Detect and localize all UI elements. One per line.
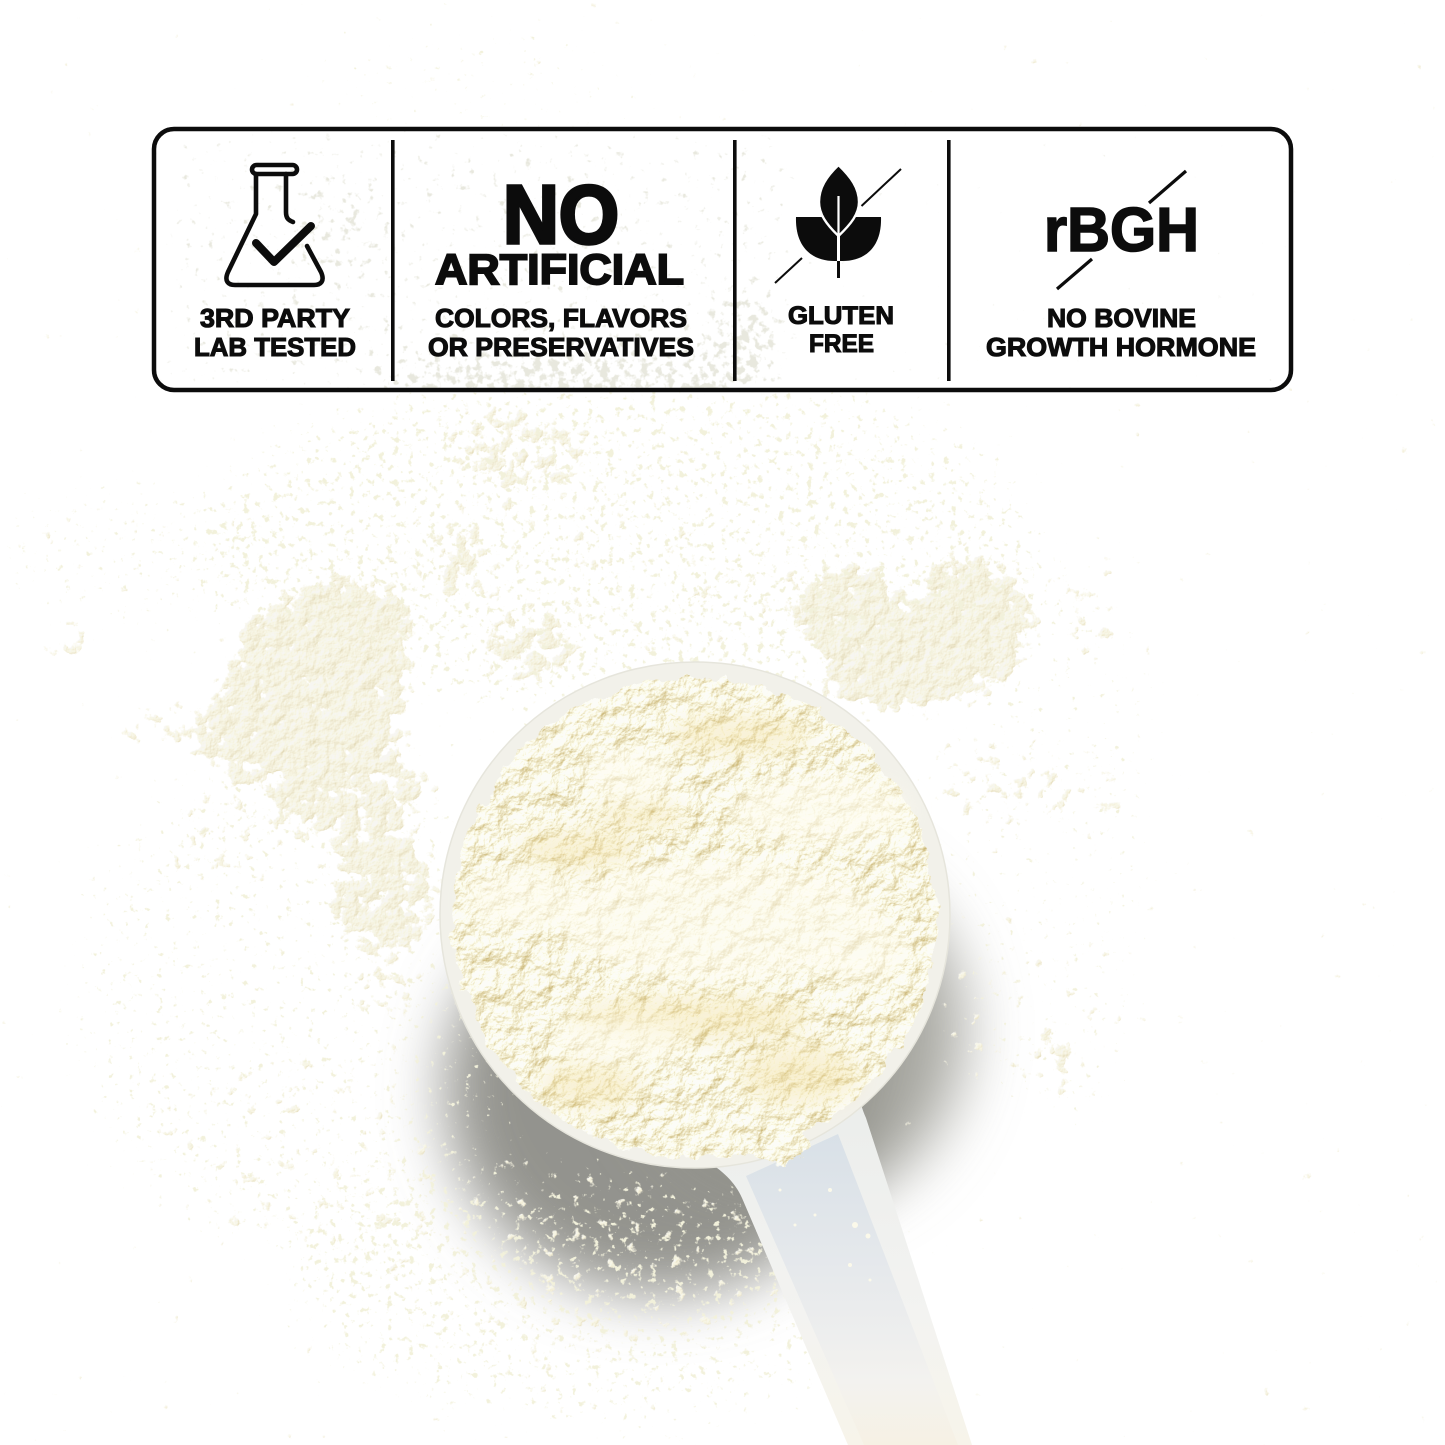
label: colors, flavors or preservatives bbox=[428, 303, 694, 362]
icon: crossed-out rBGH: rBGH bbox=[1044, 196, 1199, 265]
icon: crossed-out rBGH bbox=[1044, 171, 1199, 289]
measuring scoop bbox=[440, 662, 972, 1445]
panel box bbox=[154, 129, 1291, 390]
divider bbox=[947, 140, 951, 381]
label: colors, flavors or preservatives: OR PRESERVATIVES bbox=[428, 332, 694, 362]
icon: flask with check bbox=[226, 165, 323, 285]
heading: no artificial bbox=[435, 168, 684, 294]
label: no bovine growth hormone bbox=[986, 303, 1256, 362]
label: 3rd party lab tested bbox=[194, 303, 356, 362]
bright powder lumps bbox=[465, 749, 910, 1062]
powder heap bbox=[453, 678, 937, 1163]
powder showing through panel bbox=[170, 130, 790, 421]
warm powder tones bbox=[520, 717, 860, 1107]
label: no bovine growth hormone: GROWTH HORMONE bbox=[986, 332, 1256, 362]
scoop bowl bbox=[440, 662, 950, 1168]
scattered powder clumps bbox=[0, 400, 1150, 1425]
divider bbox=[391, 140, 395, 381]
scoop handle inner channel bbox=[746, 1134, 958, 1445]
icon: crossed-out leaves bbox=[775, 165, 901, 283]
heading: no artificial: NO bbox=[503, 168, 619, 261]
label: gluten free: FREE bbox=[809, 330, 874, 358]
powder spilled on handle bbox=[778, 1188, 872, 1282]
label: 3rd party lab tested: 3RD PARTY bbox=[200, 303, 350, 333]
heading: no artificial: ARTIFICIAL bbox=[435, 246, 684, 294]
label: no bovine growth hormone: NO BOVINE bbox=[1047, 303, 1196, 333]
divider bbox=[733, 140, 737, 381]
fine powder dust bbox=[0, 20, 1170, 1430]
badge panel bbox=[154, 129, 1291, 421]
label: gluten free bbox=[788, 302, 894, 358]
panel border bbox=[154, 129, 1291, 390]
scoop handle bbox=[705, 1080, 972, 1445]
label: 3rd party lab tested: LAB TESTED bbox=[194, 332, 356, 362]
label: colors, flavors or preservatives: COLORS, FLAVORS bbox=[435, 303, 687, 333]
scoop shadow bbox=[445, 850, 965, 1295]
label: gluten free: GLUTEN bbox=[788, 302, 894, 330]
